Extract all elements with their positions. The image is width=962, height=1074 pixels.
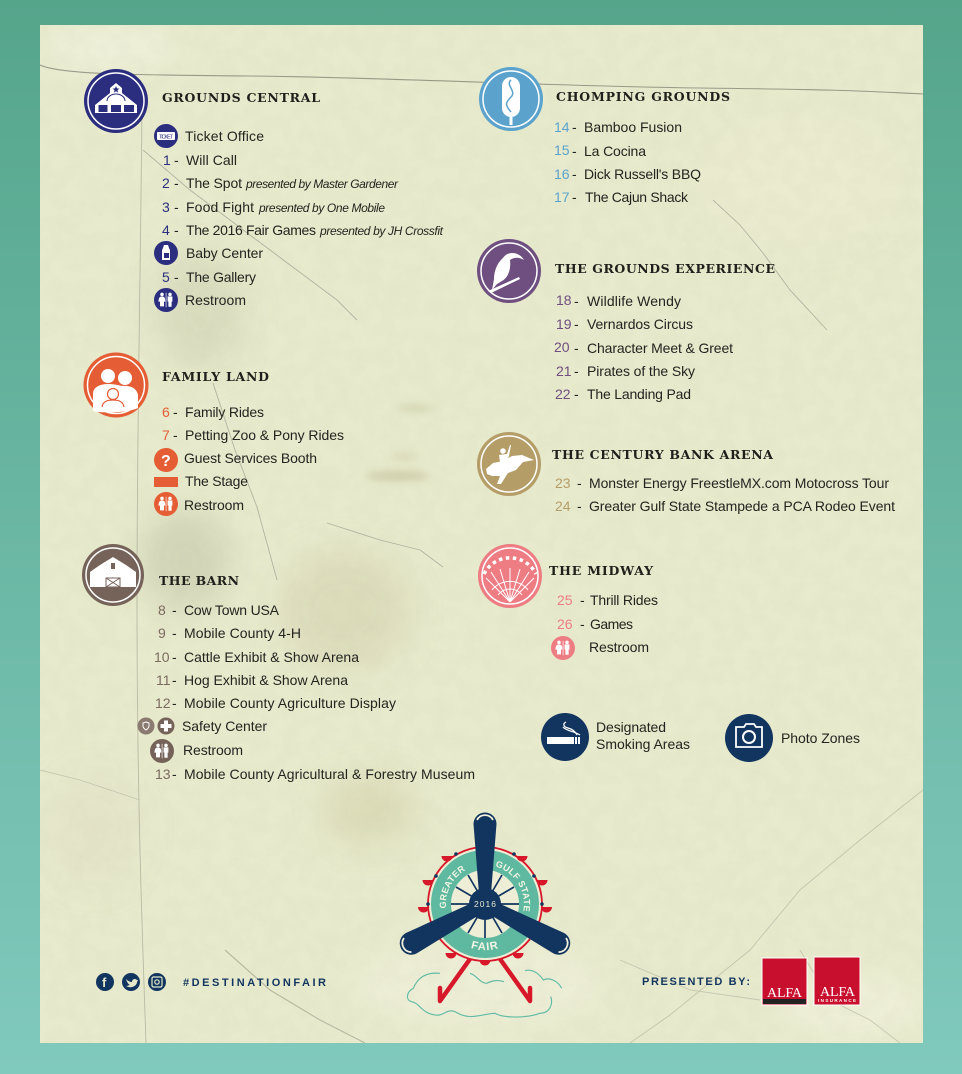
item: La Cocina: - [572, 143, 577, 159]
item: Restroom [154, 492, 244, 516]
item: Ticket Office: TICKET [159, 134, 174, 140]
item: The Cajun Shack: - [572, 189, 577, 205]
item: Wildlife Wendy: - [574, 293, 579, 309]
heading: The Midway: THE MIDWAY [549, 563, 654, 578]
item: Hog Exhibit: - [172, 672, 177, 688]
item: The Landing Pad: - [574, 386, 579, 402]
item: Food Fight: Food Fight [186, 199, 254, 215]
item: The 2016 Fair Games: 4 [162, 222, 170, 238]
item: Guest Services Booth: Guest Services Booth [184, 450, 317, 466]
legend: smoking areas: Smoking Areas [596, 736, 690, 752]
item: Pirates of the Sky: 21 [556, 363, 572, 379]
ring lettering: FAIR [471, 940, 498, 950]
item: Mobile County 4-H: Mobile County 4-H [184, 625, 301, 641]
item: Family Rides: 6 [162, 404, 170, 420]
item: The Stage [154, 473, 248, 489]
item: Cattle Exhibit: 10 [154, 649, 170, 665]
item: Guest Services Booth [154, 448, 317, 472]
item: Restroom: Restroom [185, 292, 246, 308]
item: Vernardos Circus: Vernardos Circus [587, 316, 693, 332]
item: The Spot [162, 175, 399, 191]
item: Wildlife Wendy: Wildlife Wendy [587, 293, 681, 309]
item: The 2016 Fair Games: presented by JH Crossfit [319, 224, 444, 238]
item: Family Rides: Family Rides [185, 404, 264, 420]
item: The Spot: 2 [162, 175, 170, 191]
item: Games: Games [590, 616, 633, 632]
panel: The Grounds Experience [477, 239, 775, 402]
logo: Alfa: ALFA [767, 986, 803, 1001]
item: Hog Exhibit: 11 [156, 672, 171, 688]
item: Agriculture Display: 12 [155, 695, 171, 711]
icon: toucan [477, 239, 541, 303]
cloud outline [407, 970, 562, 1017]
item: Agriculture Display: - [172, 695, 177, 711]
item: Cattle Exhibit: - [172, 649, 177, 665]
logo: Alfa [762, 958, 807, 1005]
item: Stampede: - [577, 498, 582, 514]
logo: Alfa Insurance [814, 957, 860, 1005]
legend: photo zones: Photo Zones [781, 730, 860, 746]
item: Will Call [163, 152, 237, 168]
item: Hog Exhibit: Hog Exhibit & Show Arena [184, 672, 348, 688]
item: Character Meet & Greet: 20 [554, 339, 570, 355]
item: La Cocina: 15 [554, 142, 570, 158]
propeller [396, 812, 574, 959]
item: Agriculture Display: Mobile County Agriculture Display [184, 695, 396, 711]
item: La Cocina [554, 142, 646, 159]
presented by label: PRESENTED BY: [642, 976, 750, 988]
item: Restroom: Restroom [184, 497, 244, 513]
red legs [440, 959, 530, 1001]
panel: Chomping Grounds [479, 67, 730, 205]
item: Safety Center [138, 718, 267, 734]
item: Thrill Rides: Thrill Rides [590, 592, 658, 608]
item: Will Call: - [174, 152, 179, 168]
item: Food Fight [162, 199, 385, 215]
heading: The Barn: THE BARN [159, 573, 239, 588]
heading: Grounds Central: GROUNDS CENTRAL [162, 90, 320, 105]
item: Will Call: Will Call [186, 152, 237, 168]
logo: Alfa Insurance: INSURANCE [818, 998, 856, 1003]
item: The Cajun Shack: 17 [554, 189, 570, 205]
item: Restroom [154, 288, 246, 312]
item: Bamboo Fusion: 14 [554, 119, 570, 135]
panel: The Century Bank Arena [477, 432, 895, 514]
item: The Spot: The Spot [186, 175, 242, 191]
item: The Spot: - [174, 175, 179, 191]
item: Restroom [551, 636, 649, 660]
panel: The Midway [478, 544, 658, 660]
item: Games: - [580, 616, 585, 632]
social icons [96, 973, 166, 991]
item: The Stage: The Stage [185, 473, 248, 489]
item: Monster Energy: 23 [555, 475, 571, 491]
item: The 2016 Fair Games: The 2016 Fair Games [186, 222, 316, 238]
item: Bamboo Fusion: - [572, 119, 577, 135]
item: Petting Zoo: - [173, 427, 178, 443]
item: Baby Center [154, 241, 263, 265]
item: The Landing Pad: The Landing Pad [587, 386, 691, 402]
item: Thrill Rides [557, 592, 658, 608]
logo: Greater Gulf State Fair propeller ferris wheel [400, 812, 570, 1018]
item: Dick Russell's BBQ: Dick Russell's BBQ [584, 166, 701, 182]
item: Vernardos Circus: 19 [556, 316, 572, 332]
heading: The Century Bank Arena: THE CENTURY BANK ARENA [552, 447, 773, 462]
item: Restroom: Restroom [183, 742, 243, 758]
item: Forestry Museum: - [172, 766, 177, 782]
item: The Gallery: The Gallery [186, 269, 256, 285]
item: The 2016 Fair Games [162, 222, 444, 238]
item: The Landing Pad: 22 [555, 386, 571, 402]
item: Mobile County 4-H: - [172, 625, 177, 641]
item: Food Fight: - [174, 199, 179, 215]
panel: Grounds Central [84, 69, 444, 312]
item: Mobile County 4-H: 9 [158, 625, 166, 641]
icon: bull rider [477, 432, 541, 496]
item: Monster Energy: Monster Energy FreestleMX.com Motocross Tour [589, 475, 889, 491]
legend: photo zones [725, 714, 860, 762]
item: Dick Russell's BBQ: 16 [554, 166, 570, 182]
item: The Gallery: 5 [162, 269, 170, 285]
item: Food Fight: presented by One Mobile [258, 201, 385, 215]
item: Character Meet & Greet: Character Meet & Greet [587, 340, 733, 356]
item: The Cajun Shack: The Cajun Shack [585, 189, 689, 205]
panel: Family Land [84, 352, 344, 516]
heading: The Grounds Experience: THE GROUNDS EXPERIENCE [555, 261, 775, 276]
item: Dick Russell's BBQ: - [572, 166, 577, 182]
item: Restroom: Restroom [589, 639, 649, 655]
icon: family [84, 352, 148, 418]
ferris wheel ring [418, 847, 552, 966]
item: Petting Zoo: 7 [162, 427, 170, 443]
item: Food Fight: 3 [162, 199, 170, 215]
panel: The Barn [82, 544, 475, 782]
legend: smoking areas: Designated [596, 719, 666, 735]
icon: barn [82, 544, 144, 606]
item: Baby Center: Baby Center [186, 245, 263, 261]
ring lettering: GULF STATE [496, 861, 530, 912]
item: Stampede: 24 [555, 498, 571, 514]
item: Family Rides: - [173, 404, 178, 420]
icon: corn dog [479, 67, 543, 131]
item: Cattle Exhibit: Cattle Exhibit & Show Arena [184, 649, 359, 665]
item: Petting Zoo: Petting Zoo & Pony Rides [185, 427, 344, 443]
legend: smoking areas [541, 713, 690, 761]
ring lettering: GREATER [440, 866, 466, 908]
item: Bamboo Fusion: Bamboo Fusion [584, 119, 682, 135]
item: Restroom [150, 739, 243, 763]
item: Cow Town USA: - [172, 602, 177, 618]
heading: Family Land: FAMILY LAND [162, 369, 269, 384]
social icons: f [102, 975, 107, 990]
icon: ferris wheel [478, 544, 542, 608]
item: Character Meet & Greet: - [574, 340, 579, 356]
item: Cow Town USA: Cow Town USA [184, 602, 280, 618]
item: Ticket Office [154, 124, 264, 148]
item: Pirates of the Sky: - [574, 363, 579, 379]
item: Stampede: Greater Gulf State Stampede a PCA Rodeo Event [589, 498, 895, 514]
item: Guest Services Booth: ? [161, 453, 171, 470]
item: Forestry Museum: Mobile County Agricultural & Forestry Museum [184, 766, 475, 782]
item: Forestry Museum: 13 [155, 766, 171, 782]
hashtag: #DESTINATIONFAIR [183, 977, 326, 989]
item: Monster Energy: - [577, 475, 582, 491]
item: Will Call: 1 [163, 152, 171, 168]
item: Vernardos Circus: - [574, 316, 579, 332]
item: The Gallery: - [174, 269, 179, 285]
logo: Alfa Insurance: ALFA [820, 985, 856, 1000]
item: La Cocina: La Cocina [584, 143, 646, 159]
item: Safety Center: Safety Center [182, 718, 267, 734]
item: Games: 26 [557, 616, 573, 632]
ring lettering [440, 861, 530, 950]
year: 2016 [474, 899, 496, 909]
heading: Chomping Grounds: CHOMPING GROUNDS [556, 89, 730, 104]
item: Ticket Office: Ticket Office [185, 128, 264, 144]
item: The Spot: presented by Master Gardener [245, 177, 399, 191]
item: Wildlife Wendy: 18 [556, 292, 572, 308]
item: Pirates of the Sky: Pirates of the Sky [587, 363, 695, 379]
icon: grounds central building [84, 69, 148, 133]
item: The 2016 Fair Games: - [174, 222, 179, 238]
item: Games [557, 616, 633, 632]
item: Thrill Rides: 25 [557, 592, 573, 608]
item: Thrill Rides: - [580, 592, 585, 608]
item: Cow Town USA: 8 [158, 602, 166, 618]
